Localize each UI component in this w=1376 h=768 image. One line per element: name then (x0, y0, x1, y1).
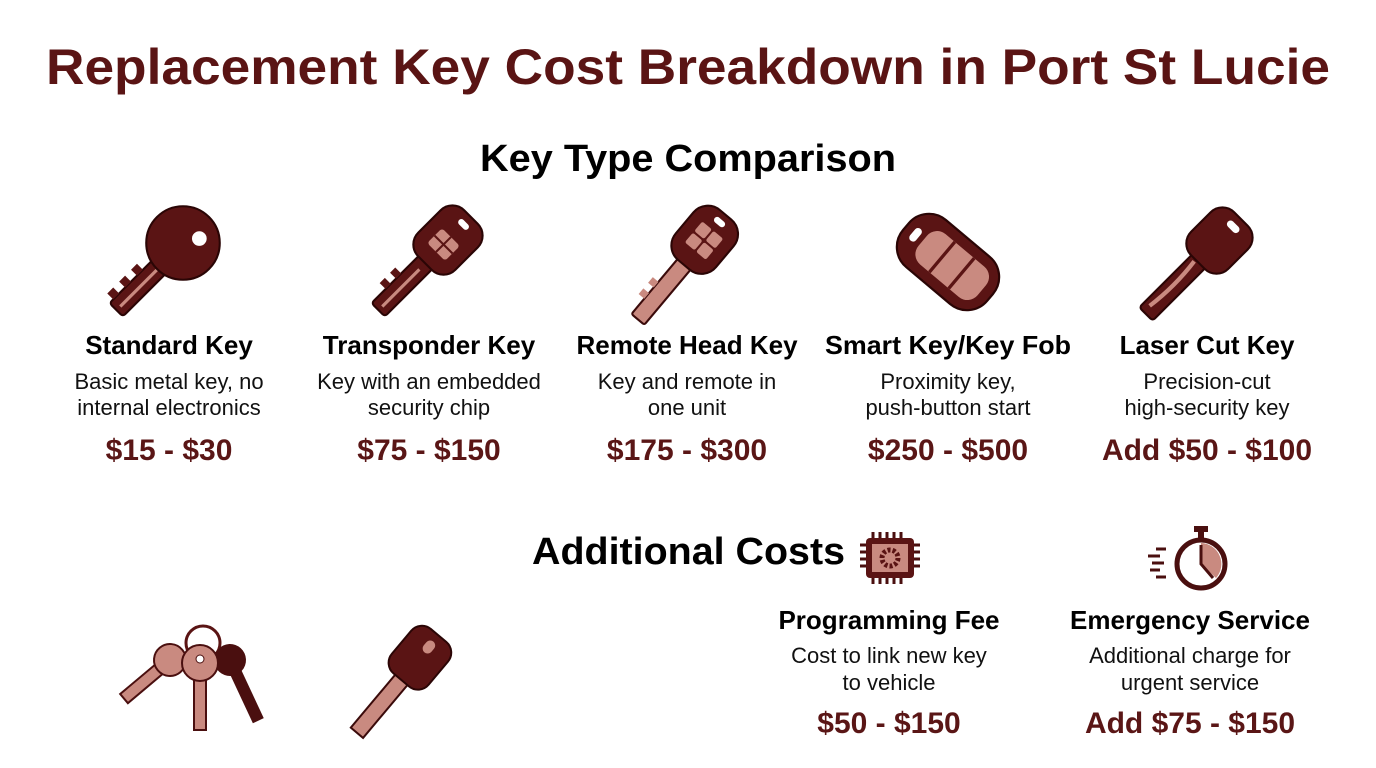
card: laser cut key: Precision-cut (1143, 369, 1271, 394)
card: emergency service: urgent service (1121, 670, 1259, 695)
icon: laser cut key (1127, 200, 1260, 333)
card: laser cut key: Add $50 - $100 (1102, 434, 1312, 467)
card: smart key: $250 - $500 (868, 434, 1028, 467)
card: standard key: Basic metal key, no (74, 369, 264, 394)
card: standard key: Standard Key (85, 330, 253, 360)
card: remote head key (576, 330, 798, 467)
card: transponder key (317, 330, 541, 467)
icon: stopwatch (1148, 526, 1225, 588)
card: emergency service: Emergency Service (1070, 605, 1310, 635)
card: programming fee: to vehicle (843, 670, 935, 695)
icon: standard key (90, 191, 235, 336)
title: Replacement Key Cost Breakdown in Port St Lucie (46, 39, 1330, 95)
card: emergency service (1070, 605, 1310, 740)
card: transponder key: Key with an embedded (317, 369, 541, 394)
card: standard key: internal electronics (77, 395, 261, 420)
card: transponder key: security chip (368, 395, 490, 420)
card: emergency service: Additional charge for (1089, 643, 1291, 668)
card: standard key (74, 330, 264, 467)
card: laser cut key (1102, 330, 1312, 467)
card: laser cut key: Laser Cut Key (1120, 330, 1295, 360)
icon: transponder key (360, 198, 490, 328)
heading: additional costs: Additional Costs (532, 531, 845, 573)
card: transponder key: $75 - $150 (357, 434, 501, 467)
icon: smart key fob (886, 203, 1010, 321)
card: transponder key: Transponder Key (323, 330, 536, 360)
card: programming fee: Programming Fee (778, 605, 1000, 635)
card: smart key (825, 330, 1071, 467)
card: smart key: push-button start (865, 395, 1031, 420)
heading: key type comparison: Key Type Comparison (480, 138, 896, 180)
card: remote head key: Key and remote in (598, 369, 776, 394)
card: programming fee (778, 605, 1000, 740)
card: remote head key: one unit (648, 395, 726, 420)
card: emergency service: Add $75 - $150 (1085, 707, 1295, 740)
card: programming fee: $50 - $150 (817, 707, 961, 740)
card: smart key: Smart Key/Key Fob (825, 330, 1071, 360)
icon: car key (339, 620, 457, 748)
card: laser cut key: high-security key (1124, 395, 1290, 420)
icon: remote head key (618, 198, 746, 336)
card: standard key: $15 - $30 (106, 434, 232, 467)
icon: chip (860, 532, 920, 584)
card: remote head key: $175 - $300 (607, 434, 767, 467)
card: remote head key: Remote Head Key (576, 330, 798, 360)
card: programming fee: Cost to link new key (791, 643, 987, 668)
card: smart key: Proximity key, (880, 369, 1016, 394)
icon: key ring (114, 626, 273, 730)
